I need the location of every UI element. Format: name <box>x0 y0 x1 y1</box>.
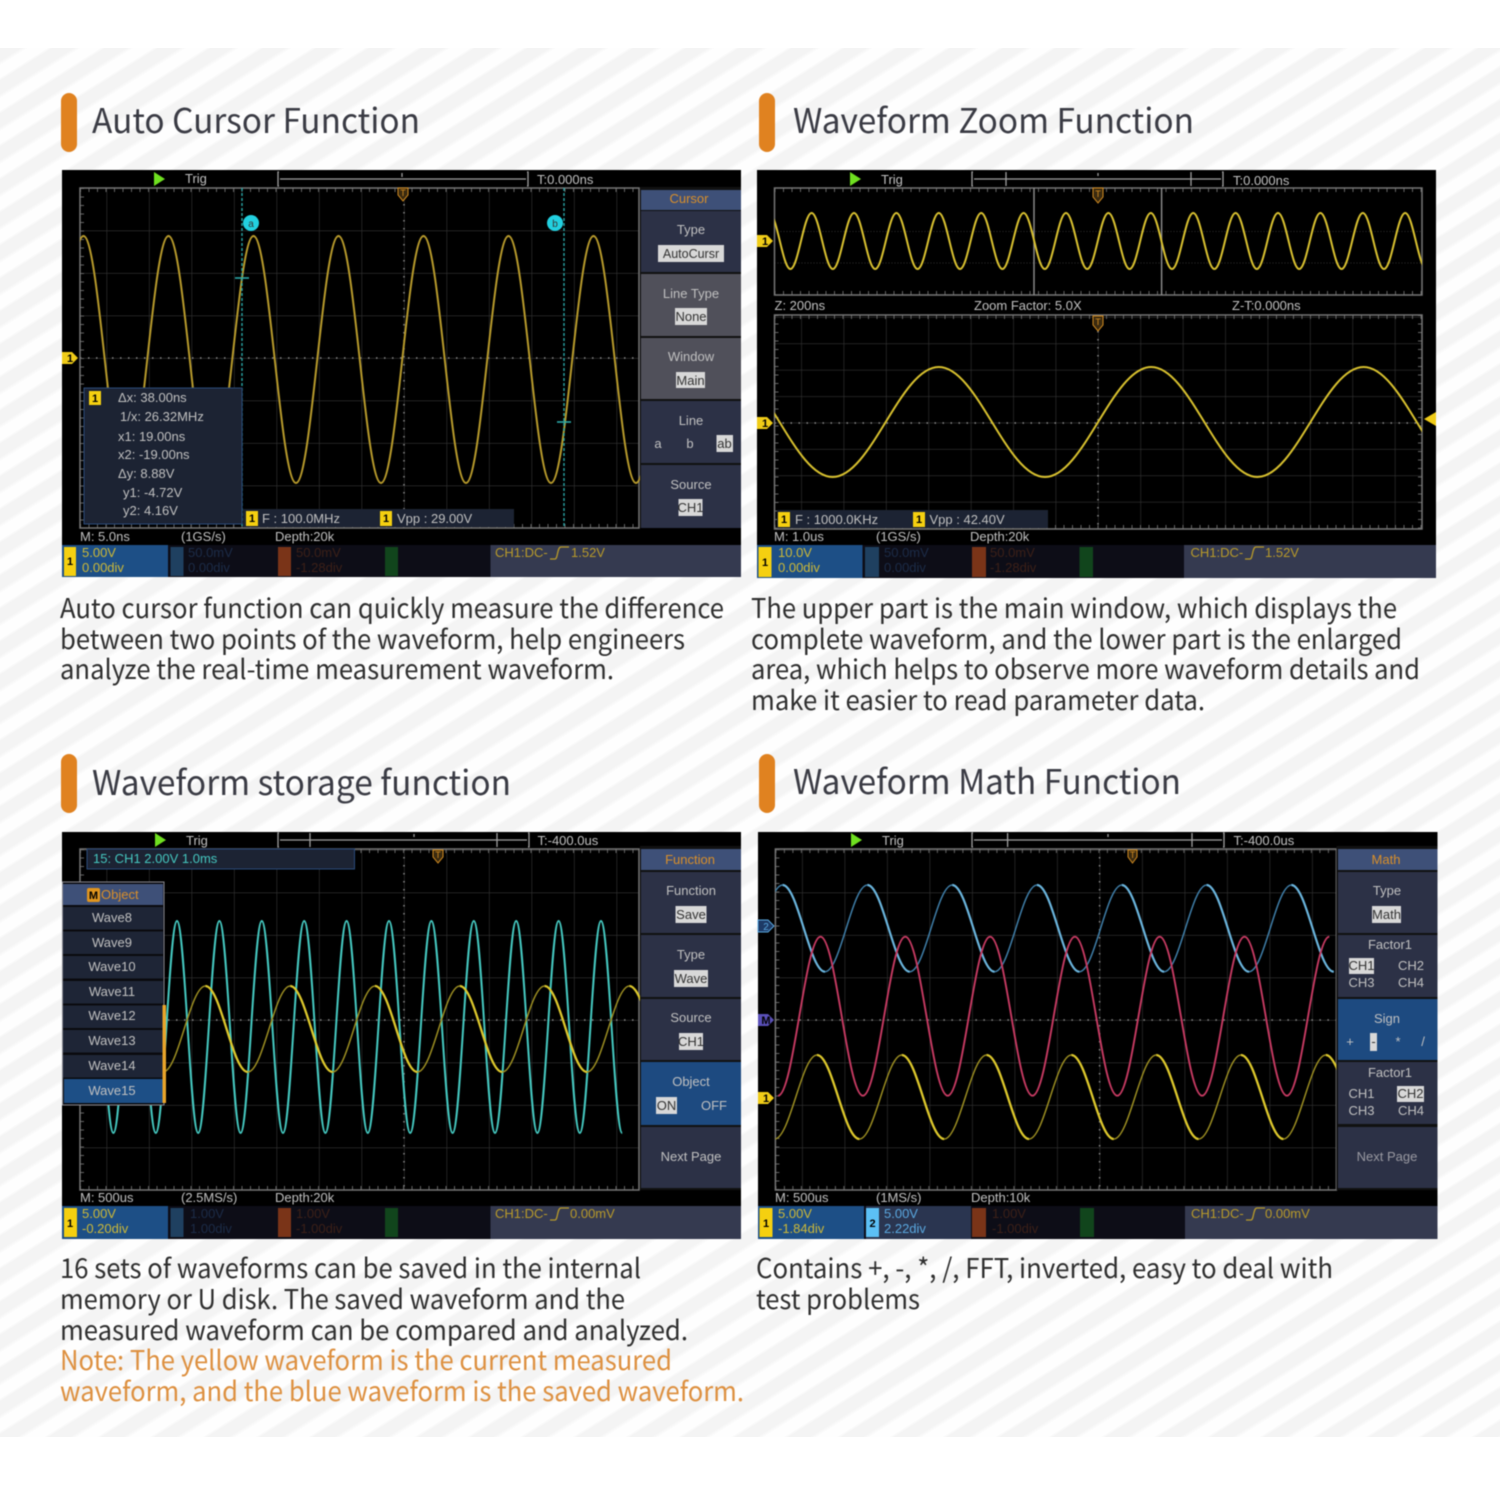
channel status bar <box>62 1206 741 1239</box>
channel status bar: 1.52V <box>571 545 605 560</box>
cursor b: b <box>552 219 558 230</box>
side menu: math: Math <box>1372 852 1400 867</box>
trigger marker: T <box>1130 850 1136 860</box>
cursor readout box: x2: -19.00ns <box>118 447 190 462</box>
channel 1 marker <box>757 417 773 430</box>
measurement strip: 1 <box>249 513 255 525</box>
side menu: function: CH1 <box>678 1034 704 1049</box>
zoom readout: Z: 200ns <box>774 298 826 313</box>
orange note: Note: The yellow waveform is the current measured <box>60 1339 672 1378</box>
cursor readout box: y1: -4.72V <box>123 485 183 500</box>
channel status bar: 0.00div <box>188 560 230 575</box>
side menu: cursor <box>640 187 741 528</box>
channel status bar: 5.00V <box>82 545 116 560</box>
measurement strip <box>777 510 1048 528</box>
orange note: waveform, and the blue waveform is the saved waveform. <box>60 1370 744 1409</box>
description: waveform storage: memory or U disk. The saved waveform and the <box>60 1278 625 1317</box>
channel status bar: CH1:DC- <box>1190 545 1243 560</box>
top status bar: T:0.000ns <box>1233 173 1290 188</box>
measurement strip: 1 <box>383 513 389 525</box>
side menu: cursor: Main <box>676 373 705 388</box>
channel status bar: 1 <box>67 1218 73 1230</box>
trigger marker: T <box>1095 317 1101 327</box>
measurement strip: 1 <box>781 514 787 526</box>
top status bar <box>850 172 1290 188</box>
channel markers <box>758 920 774 1105</box>
heading: waveform storage: Waveform storage function <box>92 756 511 805</box>
heading: waveform zoom: Waveform Zoom Function <box>793 94 1194 143</box>
cursor readout box <box>84 388 242 524</box>
channel 1 marker: 1 <box>762 418 768 430</box>
object list: Wave15 <box>88 1083 136 1098</box>
measurement strip <box>243 509 514 527</box>
side menu: math: CH2 <box>1398 958 1424 973</box>
heading marker <box>759 93 775 152</box>
channel status bar: 2 <box>869 1218 876 1230</box>
channel status bar: 1.00V <box>190 1206 224 1221</box>
side menu: math: Type <box>1373 883 1401 898</box>
channel status bar: 10.0V <box>778 545 812 560</box>
side menu: math: CH4 <box>1398 975 1424 990</box>
side menu: function: Function <box>665 852 715 867</box>
oscilloscope screen: math <box>740 832 1438 1239</box>
channel status bar: 5.00V <box>82 1206 116 1221</box>
side menu: math: CH3 <box>1348 1103 1375 1118</box>
trigger marker <box>1128 850 1137 863</box>
trigger marker: T <box>435 850 441 860</box>
timebase readout <box>774 529 1030 544</box>
object list: Wave8 <box>92 910 132 925</box>
channel status bar: -1.00div <box>296 1221 343 1236</box>
timebase readout <box>80 529 335 544</box>
channel status bar: 50.0mV <box>884 545 929 560</box>
top status bar: Trig <box>185 171 207 186</box>
trigger marker <box>1093 316 1103 331</box>
side menu: math: - <box>1371 1034 1376 1049</box>
side menu: function: Object <box>672 1074 710 1089</box>
timebase readout <box>80 1190 335 1205</box>
timebase readout: (1GS/s) <box>876 529 921 544</box>
timebase readout: M: 500us <box>775 1190 829 1205</box>
side menu: function: Save <box>676 907 706 922</box>
zoom readout: Zoom Factor: 5.0X <box>974 298 1082 313</box>
channel status bar: 50.0mV <box>296 545 341 560</box>
oscilloscope screen: zoom <box>726 170 1470 578</box>
channel status bar <box>757 545 1436 578</box>
heading marker <box>61 754 77 813</box>
object list: Wave13 <box>88 1033 136 1048</box>
side menu: cursor: ab <box>717 436 732 451</box>
side menu: math <box>1336 846 1438 1190</box>
timebase readout: Depth:20k <box>970 529 1030 544</box>
channel status bar: 0.00mV <box>1265 1206 1310 1221</box>
side menu: function: OFF <box>701 1098 727 1113</box>
measurement strip: F : 100.0MHz <box>262 511 340 526</box>
side menu: cursor: Source <box>670 477 712 492</box>
measurement strip: Vpp : 29.00V <box>397 511 472 526</box>
timebase readout: M: 5.0ns <box>80 529 130 544</box>
side menu: function: Wave <box>675 971 707 986</box>
measurement strip: F : 1000.0KHz <box>795 512 878 527</box>
channel 1 marker <box>757 235 773 248</box>
zoom window bounds <box>1034 188 1162 295</box>
timebase readout: Depth:20k <box>275 529 335 544</box>
graticule <box>80 849 639 1190</box>
side menu: function: Function <box>666 883 716 898</box>
channel 1 marker <box>62 352 78 365</box>
description: waveform storage <box>60 1247 744 1409</box>
cursor readout box: Δx: 38.00ns <box>118 390 187 405</box>
side menu: function: Type <box>677 947 705 962</box>
object list <box>62 882 166 1105</box>
top status bar <box>155 833 599 848</box>
timebase readout: (1GS/s) <box>181 529 226 544</box>
channel status bar: 0.00div <box>778 560 820 575</box>
channel status bar: -1.84div <box>778 1221 825 1236</box>
description: auto cursor <box>60 587 724 687</box>
waveform: channel 1 sine <box>80 234 641 485</box>
top status bar <box>851 833 1295 848</box>
section: auto cursor function <box>41 93 741 687</box>
side menu: cursor: CH1 <box>677 500 704 515</box>
side menu: function <box>640 846 741 1190</box>
channel markers: M <box>761 1015 771 1027</box>
side menu: function: Source <box>670 1010 712 1025</box>
timebase readout: Depth:20k <box>275 1190 335 1205</box>
graticule <box>80 188 639 528</box>
channel status bar: 5.00V <box>778 1206 812 1221</box>
timebase readout <box>775 1190 1031 1205</box>
top status bar: T:-400.0us <box>538 833 599 848</box>
channel status bar: 1 <box>67 556 73 568</box>
side menu: cursor: None <box>675 309 707 324</box>
cursor readout box: 1 <box>92 393 98 405</box>
trigger marker <box>1093 188 1103 203</box>
zoom readout: Z-T:0.000ns <box>1232 298 1301 313</box>
description: auto cursor: analyze the real-time measurement waveform. <box>60 648 614 687</box>
top status bar: T:0.000ns <box>537 172 594 187</box>
description: waveform math: Contains +, -, *, /, FFT, inverted, easy to deal with <box>756 1247 1333 1286</box>
channel status bar: 1.52V <box>1265 545 1299 560</box>
side menu: math: CH4 <box>1398 1103 1424 1118</box>
top status bar: Trig <box>186 833 208 848</box>
trigger marker: T <box>400 188 406 198</box>
waveform: current yellow trace <box>163 986 672 1072</box>
cursor a: a <box>248 219 254 230</box>
measurement strip: Vpp : 42.40V <box>930 512 1005 527</box>
top status bar: T:-400.0us <box>1234 833 1295 848</box>
heading: waveform math: Waveform Math Function <box>793 755 1181 804</box>
cursor readout box: 1/x: 26.32MHz <box>120 409 204 424</box>
timebase readout: (1MS/s) <box>876 1190 922 1205</box>
heading marker <box>61 93 77 152</box>
channel status bar: -1.28div <box>990 560 1037 575</box>
channel status bar: 50.0mV <box>188 545 233 560</box>
section: waveform math function <box>740 754 1438 1317</box>
side menu: cursor: Cursor <box>669 191 709 206</box>
object list: Wave12 <box>88 1008 136 1023</box>
waveform: compressed sine <box>769 213 1426 269</box>
description: waveform math <box>756 1247 1333 1317</box>
waveform: math red <box>778 937 1329 1096</box>
side menu: math: Next Page <box>1357 1149 1417 1164</box>
side menu: cursor: Window <box>668 349 715 364</box>
heading: auto cursor: Auto Cursor Function <box>92 94 420 143</box>
cursor b <box>547 188 571 528</box>
channel status bar: -0.20div <box>82 1221 129 1236</box>
channel status bar: 0.00div <box>884 560 926 575</box>
waveform: enlarged sine <box>726 367 1470 477</box>
graticule <box>775 849 1336 1190</box>
object list: Wave9 <box>92 935 132 950</box>
cursor readout box: y2: 4.16V <box>123 503 178 518</box>
saved wave info strip: 15: CH1 2.00V 1.0ms <box>93 851 218 866</box>
channel status bar: 50.0mV <box>990 545 1035 560</box>
top status bar: Trig <box>881 172 903 187</box>
channel 1 marker: 1 <box>762 236 768 248</box>
object list: Wave14 <box>88 1058 136 1073</box>
cursor readout box: x1: 19.00ns <box>118 429 186 444</box>
side menu: math: + <box>1346 1034 1354 1049</box>
measurement strip: 1 <box>916 514 922 526</box>
description: auto cursor: between two points of the waveform, help engineers <box>60 618 685 657</box>
section: waveform zoom function <box>726 93 1470 718</box>
channel status bar: 2.22div <box>884 1221 926 1236</box>
channel status bar: 1 <box>762 557 768 569</box>
scrollbar <box>162 1005 166 1103</box>
description: waveform zoom: The upper part is the main window, which displays the <box>751 587 1397 626</box>
channel status bar: -1.00div <box>992 1221 1039 1236</box>
description: waveform zoom: area, which helps to observe more waveform details and <box>751 648 1420 687</box>
description: waveform math: test problems <box>756 1278 920 1317</box>
channel status bar <box>62 545 741 577</box>
timebase readout: M: 500us <box>80 1190 134 1205</box>
side menu: cursor: Line <box>679 413 703 428</box>
channel 1 marker: 1 <box>67 353 73 365</box>
zoom readout <box>774 298 1301 313</box>
side menu: cursor: a <box>654 436 662 451</box>
cursor a <box>235 188 259 528</box>
side menu: cursor: Type <box>677 222 705 237</box>
top status bar <box>154 171 594 187</box>
side menu: cursor: Line Type <box>663 286 719 301</box>
side menu: math: CH3 <box>1348 975 1375 990</box>
description: waveform zoom: complete waveform, and the lower part is the enlarged <box>751 618 1402 657</box>
side menu: math: * <box>1395 1034 1401 1049</box>
description: auto cursor: Auto cursor function can quickly measure the difference <box>60 587 724 626</box>
channel status bar: CH1:DC- <box>495 545 548 560</box>
section: waveform storage function <box>60 754 744 1409</box>
side menu: math: / <box>1421 1034 1425 1049</box>
saved wave info strip <box>87 849 354 869</box>
side menu: math: Sign <box>1374 1011 1400 1026</box>
orange note <box>60 1339 744 1409</box>
timebase readout: (2.5MS/s) <box>181 1190 237 1205</box>
waveform: channel 2 blue <box>740 885 1334 972</box>
side menu: math: CH1 <box>1348 958 1375 973</box>
description: waveform zoom: make it easier to read parameter data. <box>751 679 1205 718</box>
top status bar: Trig <box>882 833 904 848</box>
side menu: cursor: AutoCursr <box>663 247 719 261</box>
side menu: function: ON <box>657 1098 676 1113</box>
timebase readout: Depth:10k <box>971 1190 1031 1205</box>
side menu: math: Factor1 <box>1368 1065 1412 1080</box>
trigger marker <box>433 850 443 863</box>
channel status bar: -1.28div <box>296 560 343 575</box>
side menu: function: Next Page <box>661 1149 721 1164</box>
trigger marker <box>398 188 408 201</box>
channel status bar: 1.00div <box>190 1221 232 1236</box>
channel status bar: 1.00V <box>296 1206 330 1221</box>
side menu: cursor: b <box>686 436 694 451</box>
object list: Object <box>101 887 139 902</box>
channel markers: 2 <box>763 922 769 933</box>
object list: Wave11 <box>89 984 135 999</box>
cursor readout box: Δy: 8.88V <box>118 466 175 481</box>
channel status bar: CH1:DC- <box>1191 1206 1244 1221</box>
object list: Wave10 <box>88 959 136 974</box>
channel status bar: 0.00mV <box>570 1206 615 1221</box>
description: waveform storage: measured waveform can be compared and analyzed. <box>60 1309 688 1348</box>
trigger marker: T <box>1095 189 1101 199</box>
lower zoomed window <box>726 315 1470 529</box>
channel markers: 1 <box>763 1093 769 1105</box>
channel status bar: 1.00V <box>992 1206 1026 1221</box>
waveform: saved blue trace <box>71 921 622 1133</box>
channel status bar: 1 <box>763 1218 769 1230</box>
channel status bar: 0.00div <box>82 560 124 575</box>
side menu: math: CH1 <box>1348 1086 1375 1101</box>
oscilloscope screen: storage <box>62 832 741 1239</box>
object list: M <box>89 890 98 902</box>
trigger level marker <box>1424 412 1436 426</box>
description: waveform zoom <box>751 587 1420 718</box>
side menu: math: Math <box>1372 907 1401 922</box>
channel status bar: 5.00V <box>884 1206 918 1221</box>
channel status bar: CH1:DC- <box>495 1206 548 1221</box>
side menu: math: CH2 <box>1397 1086 1424 1101</box>
side menu: math: Factor1 <box>1368 937 1412 952</box>
oscilloscope screen: auto cursor <box>41 170 741 577</box>
channel status bar <box>758 1206 1438 1239</box>
timebase readout: M: 1.0us <box>774 529 824 544</box>
description: waveform storage: 16 sets of waveforms can be saved in the internal <box>60 1247 641 1286</box>
waveform: channel 1 yellow <box>775 1055 1368 1139</box>
upper main window <box>757 188 1426 295</box>
heading marker <box>759 754 775 813</box>
